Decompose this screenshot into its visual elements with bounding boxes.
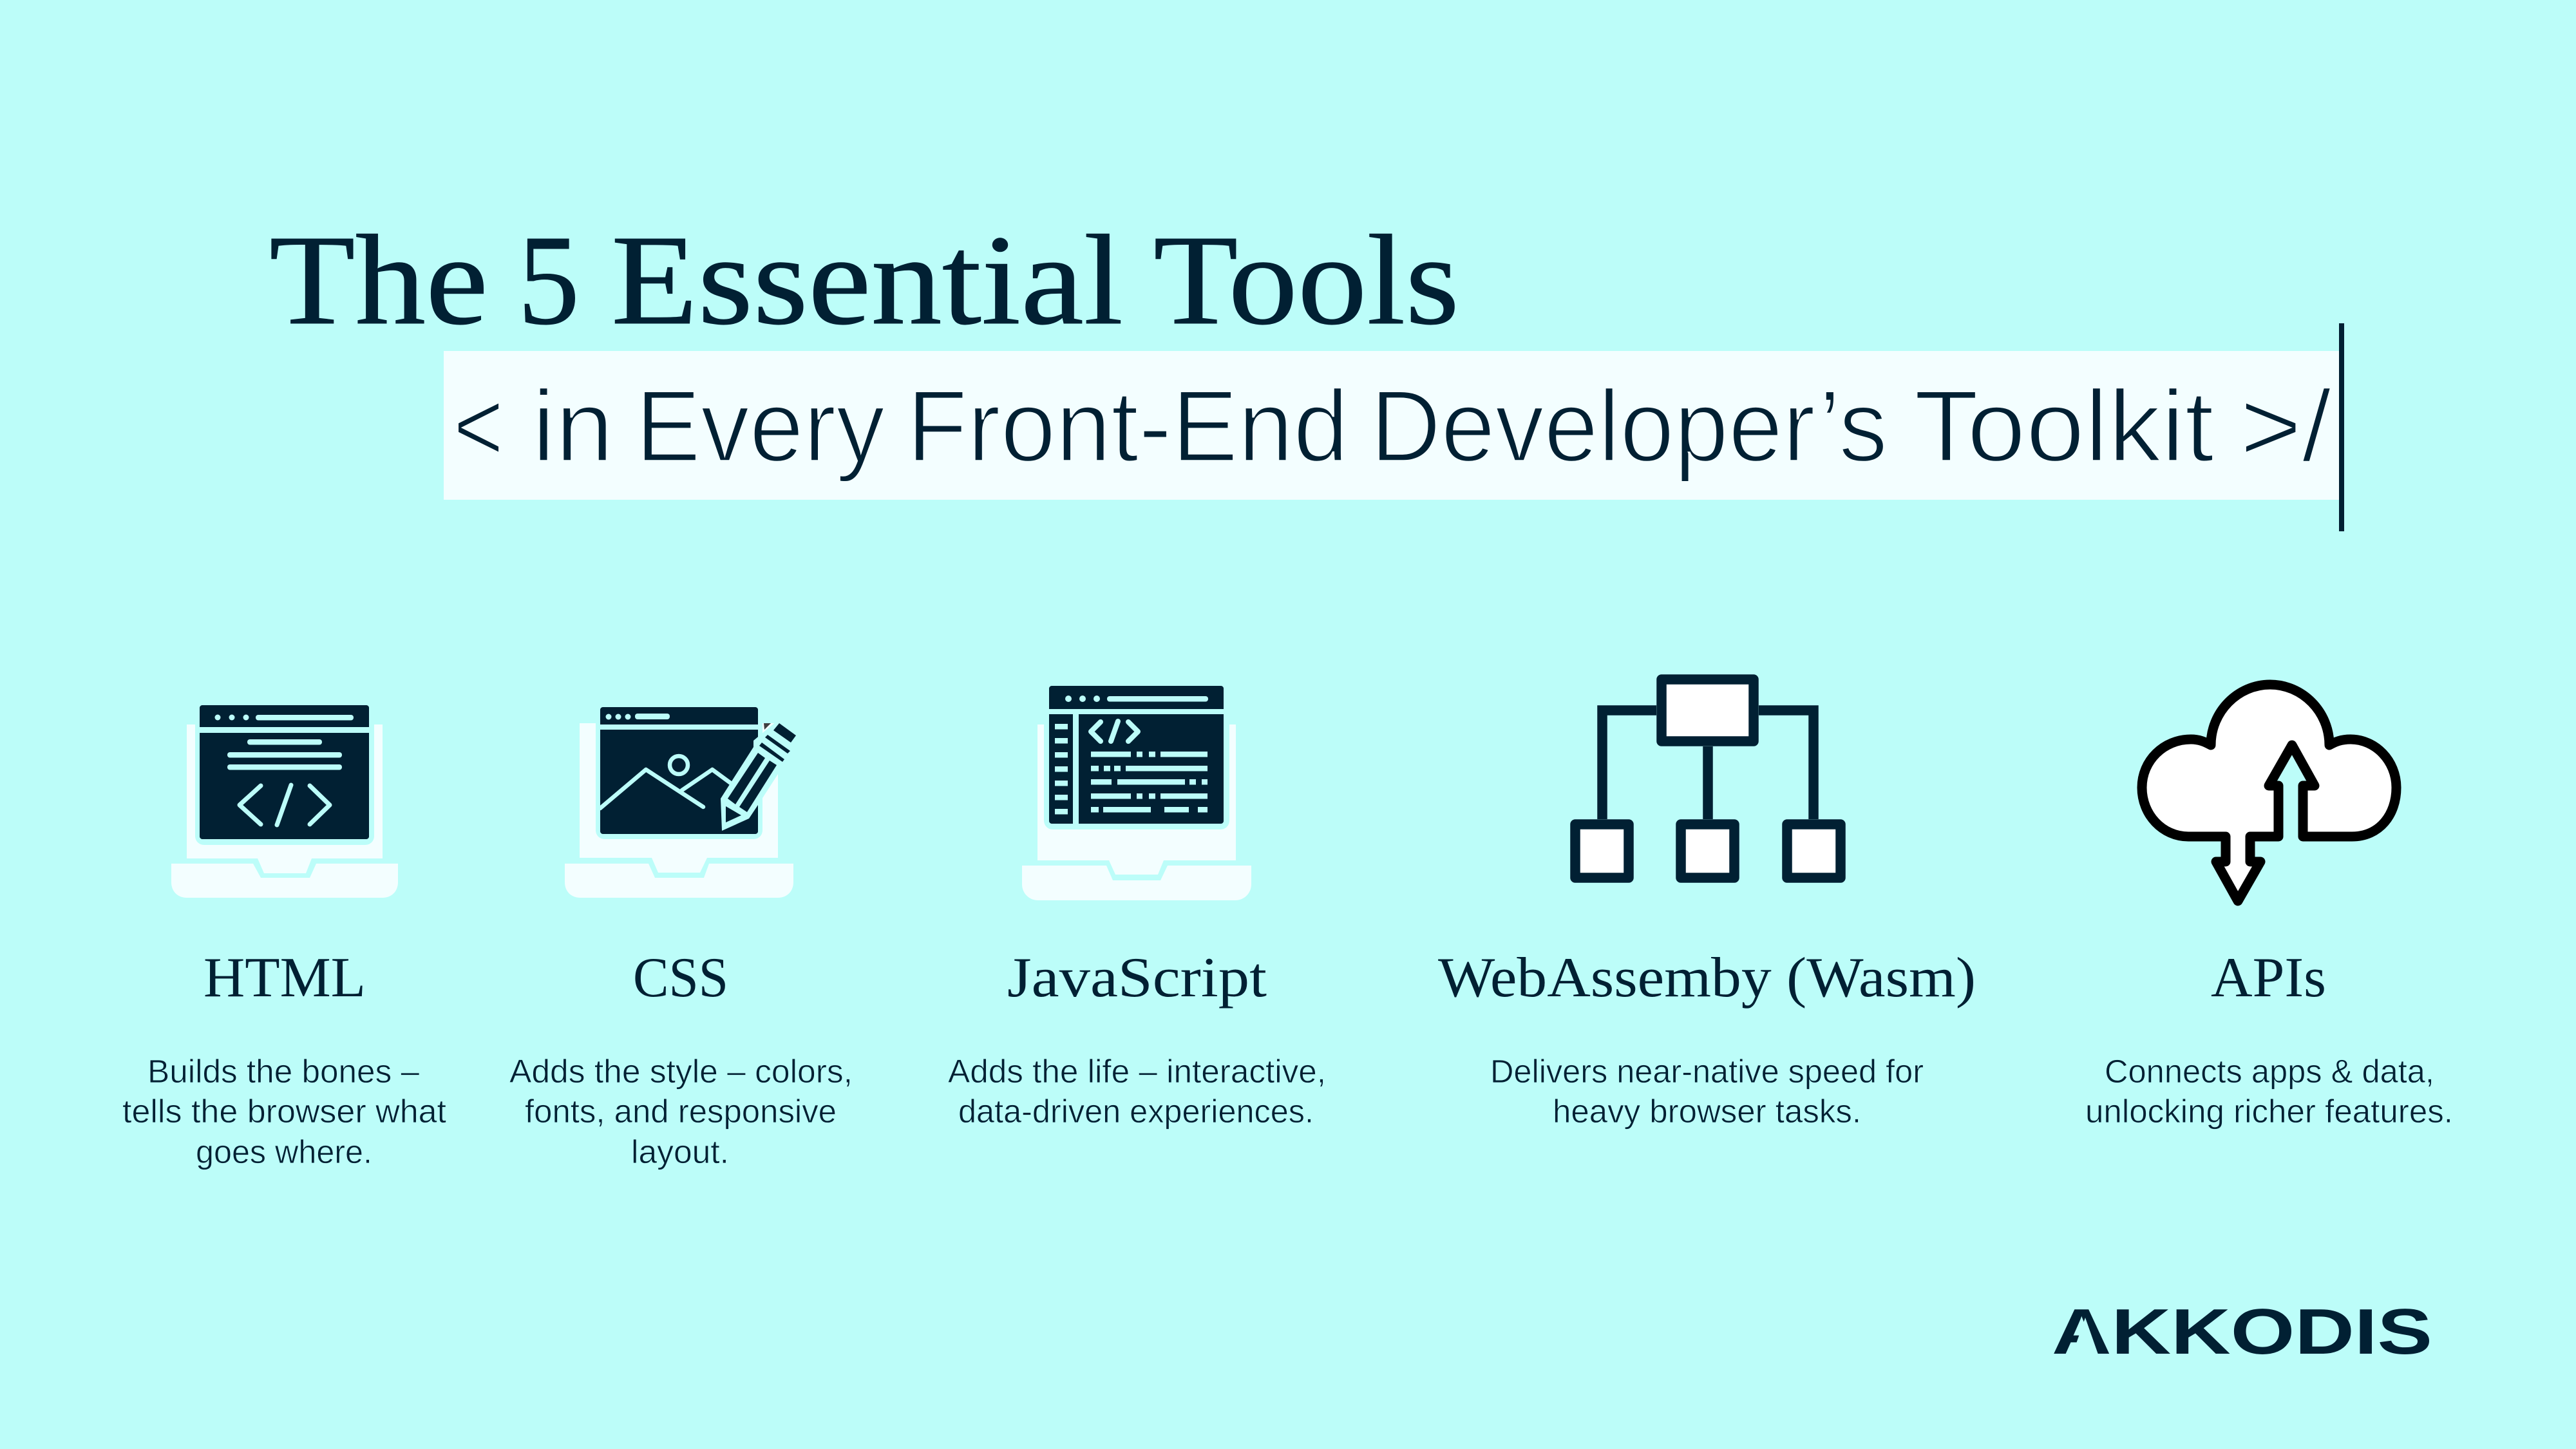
subtitle highlight with cursor (444, 323, 2344, 531)
icon: hierarchy diagram (1575, 679, 1841, 878)
heading: WebAssemby (Wasm): WebAssemby (Wasm) (1438, 947, 1976, 1009)
description: HTML: Builds the bones – (147, 1053, 420, 1090)
subtitle text: < (453, 370, 504, 483)
icon: laptop with image window and pencil (565, 702, 799, 898)
title: 5 (518, 209, 580, 352)
description: JavaScript: data-driven experiences. (958, 1093, 1314, 1130)
subtitle text: Front-End (907, 370, 1349, 483)
panel: HTML (122, 702, 446, 1170)
icon: cloud with up and down arrows (2142, 685, 2396, 901)
heading: HTML: HTML (204, 947, 366, 1009)
panel: CSS (509, 702, 853, 1170)
description: WebAssembly: Delivers near-native speed for (1490, 1053, 1924, 1090)
heading: JavaScript: JavaScript (1007, 947, 1267, 1009)
description: CSS (509, 1053, 853, 1170)
icon: laptop with HTML window (171, 702, 398, 898)
subtitle text: >/ (2240, 370, 2331, 483)
description: APIs: unlocking richer features. (2085, 1093, 2453, 1130)
title (269, 209, 1459, 352)
description: HTML: tells the browser what (122, 1093, 446, 1130)
title: Essential (611, 209, 1123, 352)
text cursor (2339, 323, 2344, 531)
description: WebAssembly: heavy browser tasks. (1553, 1093, 1861, 1130)
title: Tools (1153, 209, 1459, 352)
description: CSS: fonts, and responsive (525, 1093, 837, 1130)
heading: CSS: CSS (633, 947, 728, 1009)
subtitle text: Developer’s (1370, 370, 1888, 483)
description: APIs: Connects apps & data, (2105, 1053, 2434, 1090)
subtitle text (453, 370, 2331, 483)
description: APIs (2085, 1053, 2453, 1130)
subtitle text: Toolkit (1914, 370, 2214, 483)
panel: JavaScript (948, 683, 1326, 1130)
description: CSS: Adds the style – colors, (509, 1053, 853, 1090)
icon: laptop with code editor window (1022, 683, 1251, 900)
description: JavaScript: Adds the life – interactive, (948, 1053, 1326, 1090)
description: HTML: goes where. (196, 1133, 372, 1170)
heading: APIs: APIs (2211, 947, 2326, 1009)
title: The (269, 209, 488, 352)
logo: Akkodis: AKKODIS (2052, 1296, 2432, 1368)
description: CSS: layout. (631, 1133, 729, 1170)
panel: WebAssembly (1438, 679, 1976, 1130)
description: JavaScript (948, 1053, 1326, 1130)
description: WebAssembly (1490, 1053, 1924, 1130)
panel: APIs (2085, 685, 2453, 1130)
description: HTML (122, 1053, 446, 1170)
subtitle text: in (532, 370, 614, 483)
subtitle text: Every (636, 370, 885, 483)
